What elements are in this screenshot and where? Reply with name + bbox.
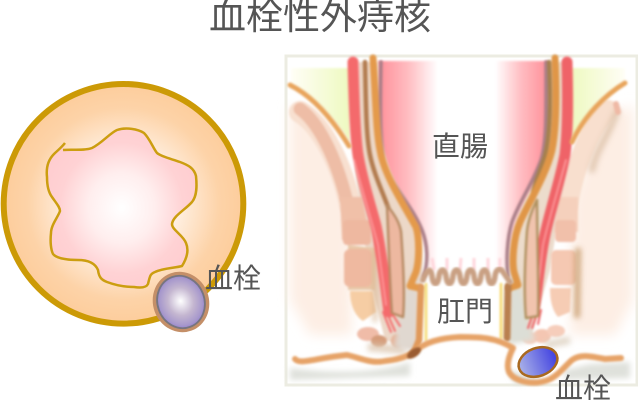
- inner muscle right: [525, 200, 538, 318]
- label: thrombus left: 血栓: [205, 263, 261, 294]
- muscle block shadows: [368, 248, 578, 350]
- panel frame: [286, 56, 637, 385]
- sphincter muscle blocks: [340, 197, 578, 348]
- cross-section lumen: [47, 129, 197, 288]
- inner muscle left: [387, 205, 404, 317]
- inner canal tissue: [394, 250, 418, 352]
- thrombus in cross-section: [144, 264, 218, 340]
- label: anus: 肛門: [437, 296, 493, 327]
- skin shadows: [290, 362, 630, 384]
- levator muscle: [300, 104, 618, 205]
- anal canal walls: [414, 284, 508, 352]
- dark junction mark: [405, 345, 423, 361]
- canal side tissue underlay: [355, 62, 423, 350]
- right rectal wall layers: [507, 58, 568, 328]
- anal crypts wavy line: [423, 269, 510, 284]
- left rectal wall layers: [353, 58, 427, 332]
- soft tissue backgrounds: [290, 105, 633, 335]
- rectum lumen shading: [378, 61, 549, 272]
- panel: anal canal cross-section: [4, 84, 243, 340]
- label: rectum: 直腸: [432, 131, 488, 162]
- perianal skin line: [295, 337, 621, 383]
- thrombus in section: [514, 342, 562, 382]
- outer muscle lines: [290, 83, 625, 146]
- cross-section outer wall: [4, 84, 243, 324]
- mucosal fringe above crypts: [432, 258, 500, 270]
- panel: anatomical longitudinal section: [286, 56, 637, 385]
- fat pads upper: [291, 68, 350, 142]
